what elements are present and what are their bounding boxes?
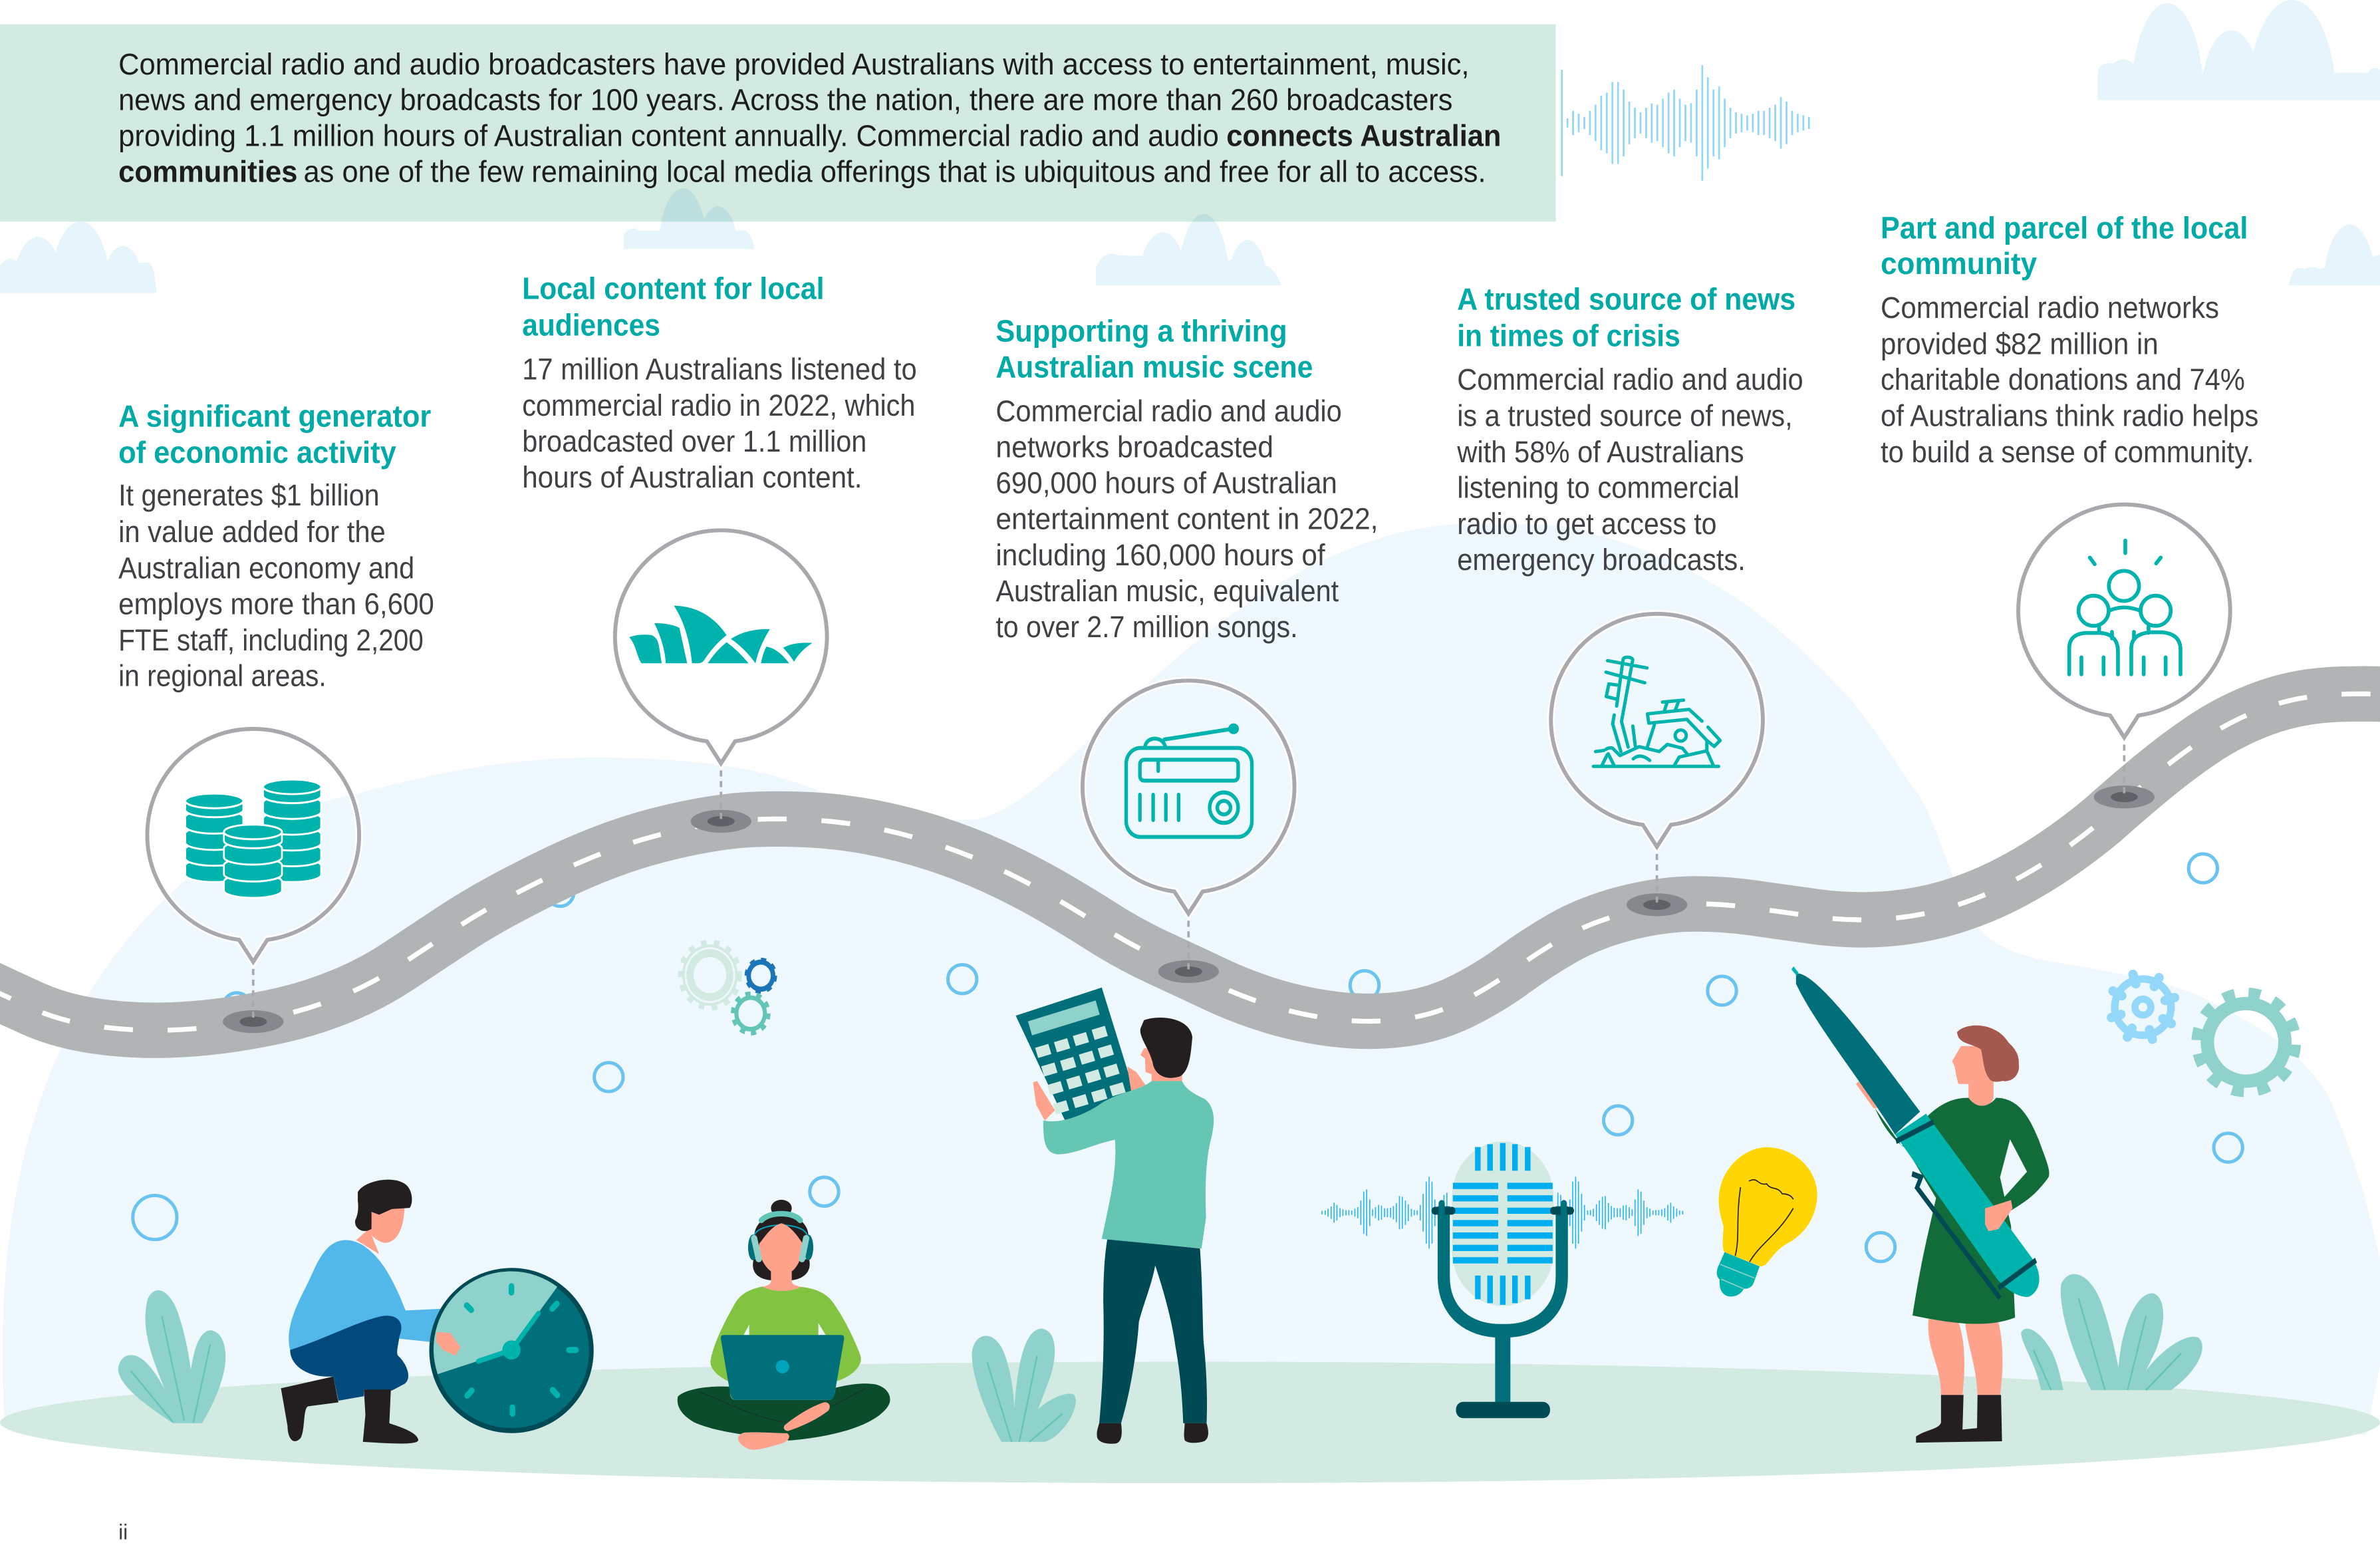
- text: economic activity: FTE staff, including 2,200: [118, 623, 424, 657]
- person crouching: [281, 1180, 440, 1443]
- text: economic activity: employs more than 6,600: [118, 587, 434, 621]
- panel: economic activity: [118, 398, 434, 1033]
- gear: teal large: [2194, 991, 2298, 1094]
- cloud: centre: [1096, 214, 1281, 285]
- plant: left: [118, 1290, 225, 1423]
- heading: local content: Local content for local: [522, 271, 824, 306]
- heading: trusted news: A trusted source of news: [1457, 282, 1795, 317]
- text: economic activity: Australian economy and: [118, 551, 414, 585]
- heading: local content: [522, 271, 824, 342]
- gear: light blue: [2111, 974, 2175, 1040]
- icon: clock: [432, 1270, 591, 1431]
- intro text: Commercial radio and audio broadcasters have provided Australians with access to entertainment, music,: [118, 47, 1469, 81]
- bubble and pin: coins: [147, 729, 359, 1033]
- text: local community: of Australians think radio helps: [1881, 398, 2258, 432]
- text: local community: charitable donations and 74%: [1881, 362, 2245, 396]
- text: local community: provided $82 million in: [1881, 327, 2159, 360]
- gear: pale large: [680, 942, 739, 1008]
- text: music scene: including 160,000 hours of: [995, 538, 1325, 572]
- cloud: under banner: [624, 188, 754, 249]
- figure: man with calculator: [1015, 988, 1214, 1444]
- gears: left cluster: [680, 942, 775, 1033]
- page number: ii: [118, 1520, 128, 1544]
- text: local community: [1881, 291, 2258, 469]
- text: local content: hours of Australian content.: [522, 460, 862, 494]
- text: local content: 17 million Australians listened to: [522, 352, 917, 386]
- heading: music scene: Supporting a thriving: [995, 314, 1287, 349]
- text: local content: [522, 352, 917, 494]
- cloud: top right: [2097, 0, 2380, 100]
- text: economic activity: in value added for the: [118, 515, 386, 549]
- gear: teal: [733, 994, 768, 1033]
- text: trusted news: emergency broadcasts.: [1457, 543, 1746, 577]
- clouds: [0, 0, 2380, 293]
- sound wave: left of microphone: [1322, 1177, 1447, 1248]
- text: economic activity: [118, 478, 434, 693]
- intro banner: [0, 25, 1556, 221]
- heading: economic activity: of economic activity: [118, 435, 396, 470]
- text: music scene: 690,000 hours of Australian: [995, 466, 1337, 500]
- gear: blue: [747, 960, 775, 992]
- small circles: [133, 854, 2242, 1262]
- icon: radio: [1126, 726, 1252, 837]
- ground: [0, 1361, 2380, 1483]
- text: music scene: Commercial radio and audio: [995, 394, 1342, 428]
- icon: laptop: [721, 1335, 844, 1400]
- intro text: as one of the few remaining local media offerings that is ubiquitous and free for all to access.: [304, 154, 1486, 188]
- text: local content: broadcasted over 1.1 million: [522, 424, 866, 458]
- intro text: providing 1.1 million hours of Australian content annually. Commercial radio and audio: [118, 119, 1219, 153]
- intro text: [118, 47, 1501, 188]
- bubble and pin: community: [2018, 505, 2230, 808]
- figure: woman with pen: [1793, 968, 2049, 1443]
- text: trusted news: [1456, 362, 1803, 577]
- heading: local content: audiences: [522, 307, 660, 342]
- icon: coins: [186, 779, 321, 898]
- text: local community: Commercial radio networks: [1881, 291, 2219, 325]
- cloud: left: [0, 221, 156, 293]
- text: trusted news: Commercial radio and audio: [1457, 362, 1803, 396]
- cloud: right edge: [2289, 225, 2380, 285]
- icon: pen: [1793, 968, 2040, 1298]
- heading: trusted news: [1457, 282, 1795, 352]
- road: [0, 694, 2380, 1030]
- heading: music scene: [995, 314, 1313, 384]
- text: local content: commercial radio in 2022, which: [522, 388, 915, 422]
- icon: light bulb: [1717, 1147, 1817, 1296]
- heading: music scene: Australian music scene: [995, 349, 1313, 384]
- heading: economic activity: A significant generator: [118, 398, 431, 433]
- text: trusted news: listening to commercial: [1457, 471, 1740, 505]
- text: economic activity: It generates $1 billion: [118, 478, 380, 512]
- intro text: communities: [118, 154, 297, 188]
- panel: local community: [1881, 210, 2258, 808]
- icon: opera house: [629, 606, 813, 663]
- panel: trusted news: [1456, 282, 1803, 916]
- text: local community: to build a sense of community.: [1881, 435, 2254, 469]
- background blob: [3, 523, 2380, 1435]
- sound wave: right of microphone: [1558, 1177, 1682, 1248]
- icon: storm damage: [1593, 657, 1720, 766]
- icon: calculator: [1015, 988, 1134, 1126]
- text: music scene: Australian music, equivalent: [995, 574, 1339, 608]
- text: trusted news: with 58% of Australians: [1456, 435, 1744, 469]
- gears: right cluster: [2111, 974, 2298, 1094]
- icon: microphone: [1435, 1141, 1571, 1418]
- bubble and pin: storm damage: [1551, 614, 1763, 916]
- plant: centre: [972, 1329, 1076, 1442]
- intro text: connects Australian: [1226, 119, 1501, 153]
- figure: woman with laptop: [678, 1200, 890, 1450]
- text: music scene: [995, 394, 1379, 644]
- sound wave: top: [1562, 65, 1809, 181]
- heading: local community: [1881, 210, 2248, 281]
- bubble and pin: opera house: [615, 530, 827, 833]
- panel: local content: [522, 271, 917, 833]
- figure: man with clock: [281, 1180, 591, 1443]
- bubble and pin: radio: [1083, 680, 1295, 983]
- heading: trusted news: in times of crisis: [1457, 318, 1680, 352]
- intro text: news and emergency broadcasts for 100 years. Across the nation, there are more than 260 broadcasters: [118, 83, 1452, 117]
- icon: community: [2069, 541, 2181, 674]
- heading: local community: Part and parcel of the local: [1881, 210, 2248, 245]
- text: trusted news: radio to get access to: [1457, 507, 1717, 541]
- heading: economic activity: [118, 398, 431, 470]
- text: trusted news: is a trusted source of news,: [1457, 398, 1793, 432]
- heading: local community: community: [1881, 246, 2037, 281]
- text: music scene: entertainment content in 2022,: [995, 501, 1379, 535]
- text: music scene: to over 2.7 million songs.: [995, 610, 1298, 644]
- text: music scene: networks broadcasted: [995, 430, 1273, 464]
- plant: right: [2021, 1274, 2202, 1390]
- panel: music scene: [995, 314, 1379, 983]
- text: economic activity: in regional areas.: [118, 659, 327, 693]
